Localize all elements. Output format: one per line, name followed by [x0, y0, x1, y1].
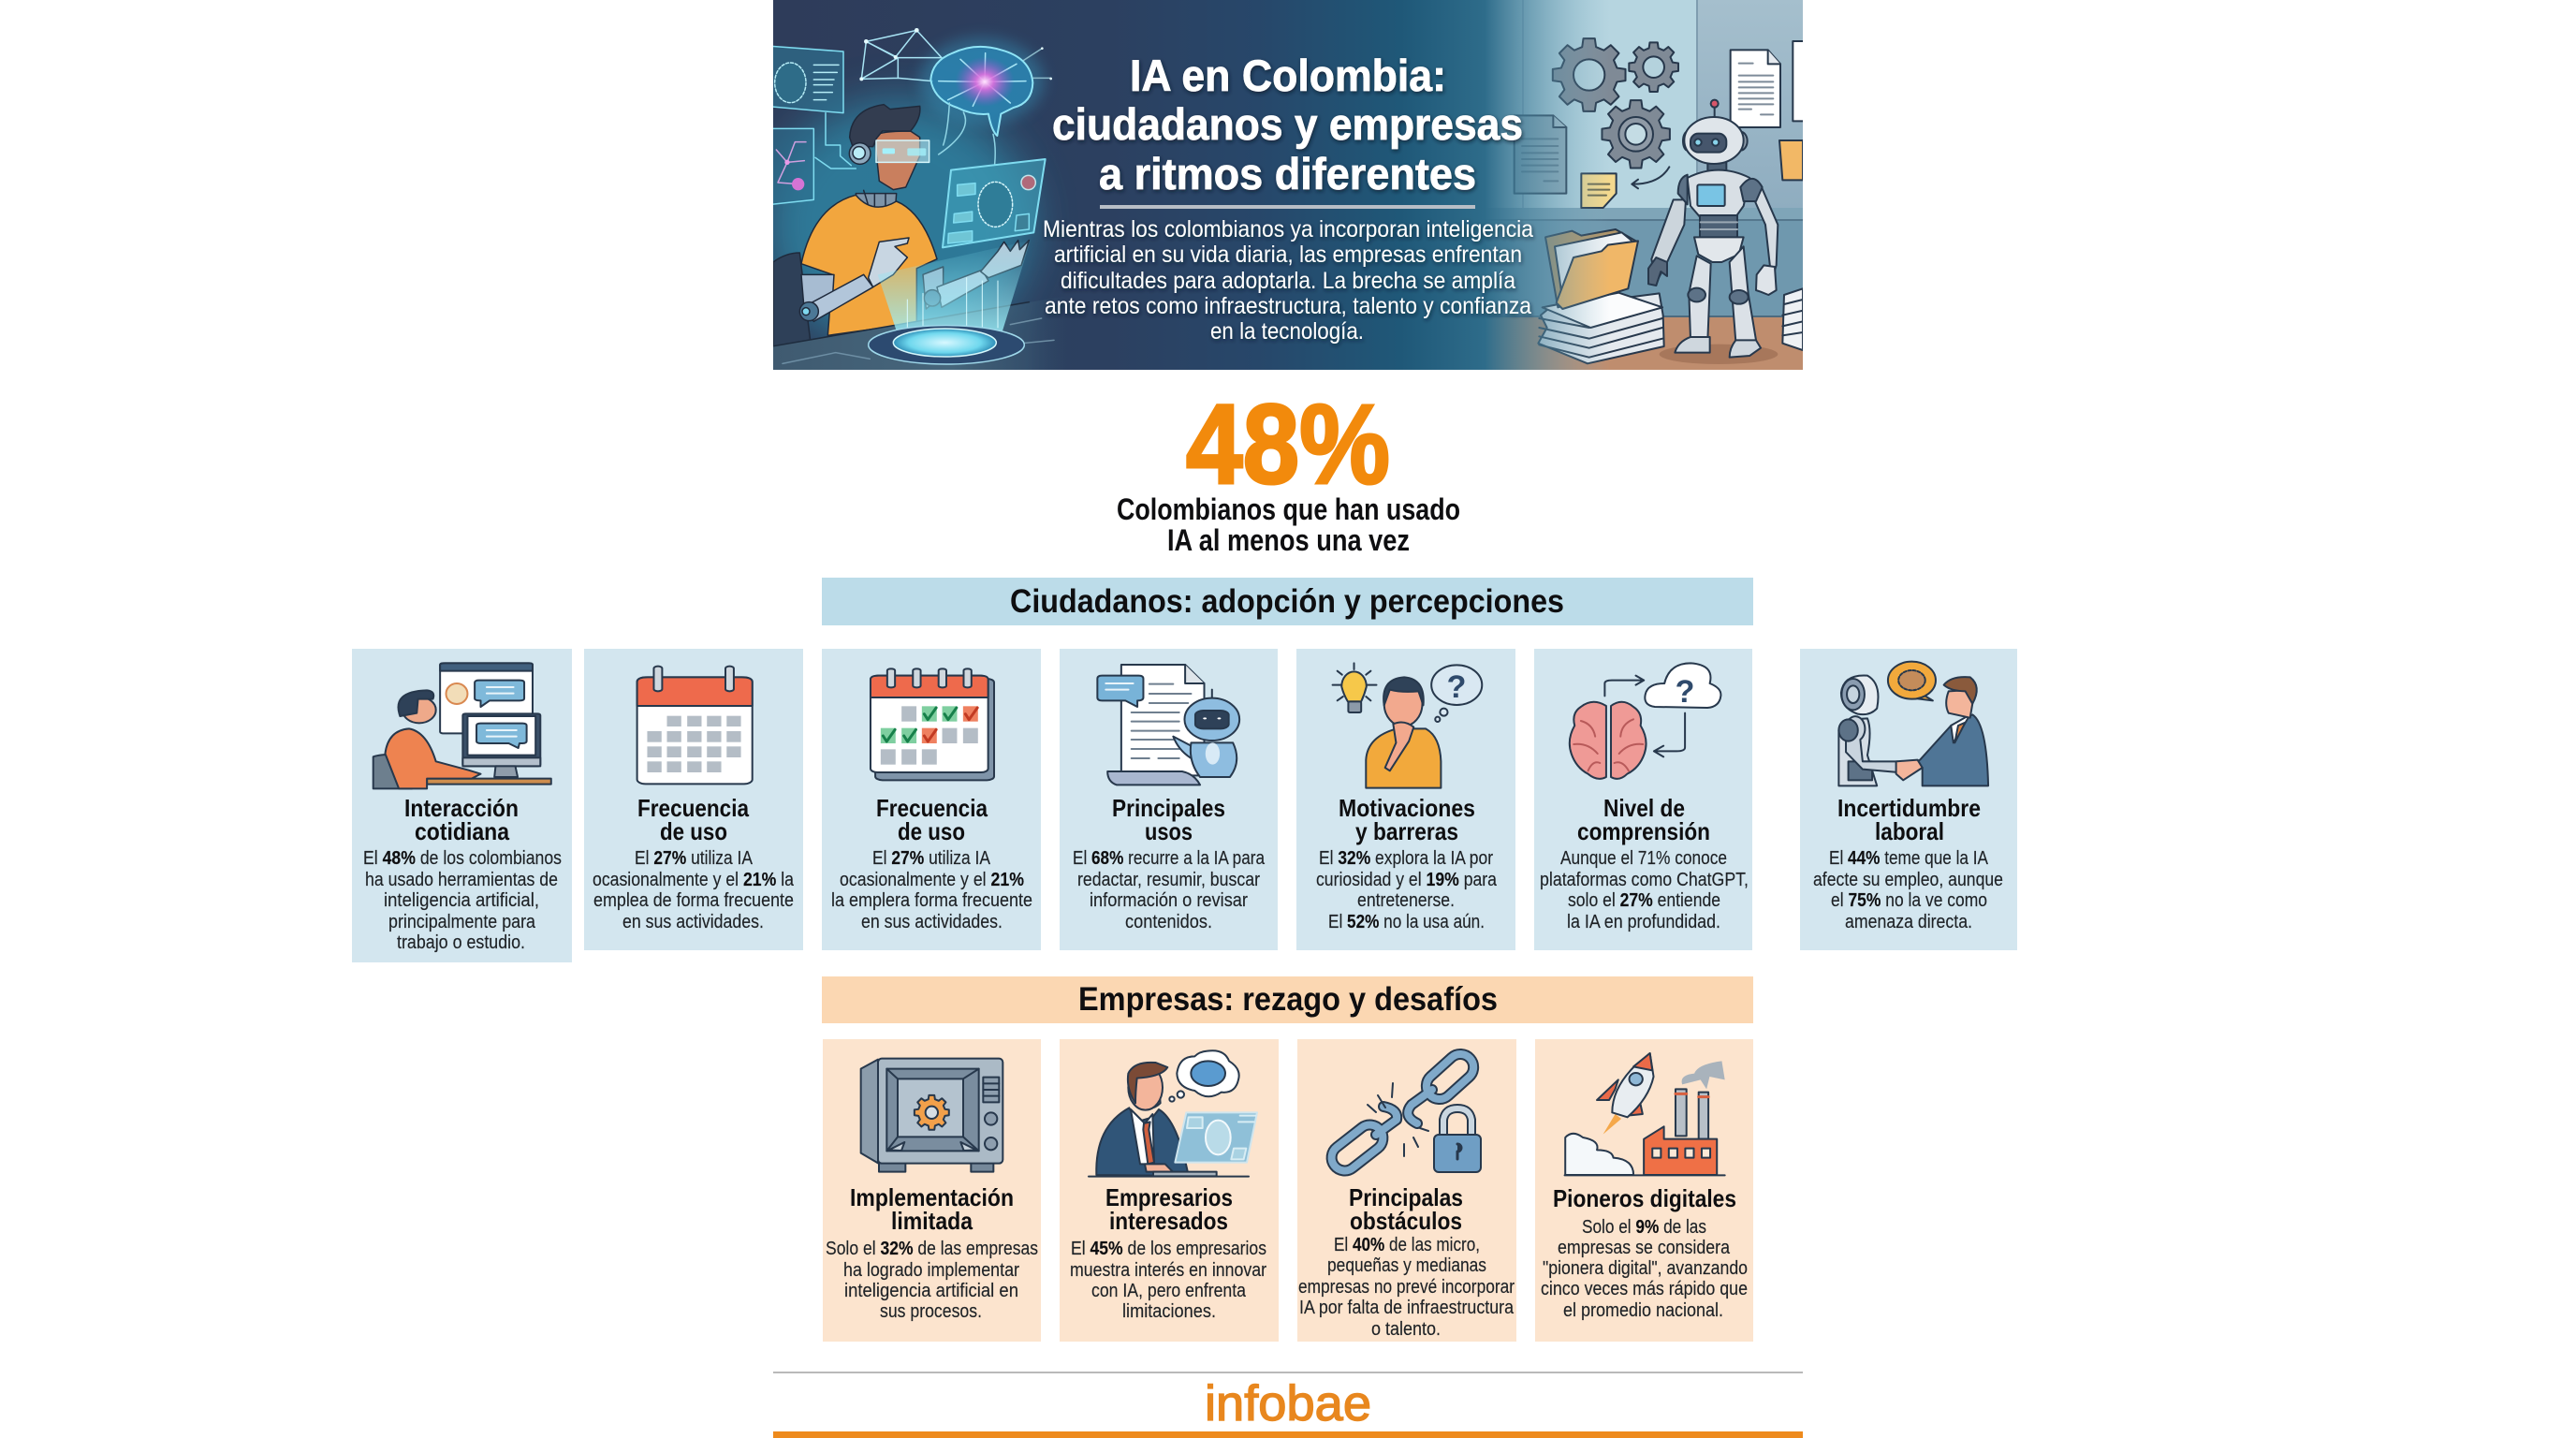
card title: comprensión — [1577, 817, 1710, 845]
card title: Interacción — [404, 794, 519, 822]
card text: El 48% de los colombianos — [363, 848, 562, 869]
card text: Solo el 32% de las empresas — [826, 1239, 1038, 1259]
card title — [850, 1183, 1014, 1235]
card text: IA por falta de infraestructura — [1299, 1298, 1515, 1318]
card: incertidumbre laboral — [1800, 649, 2017, 950]
card text: afecte su empleo, aunque — [1813, 870, 2003, 890]
card text: sus procesos. — [880, 1301, 982, 1322]
stat caption — [1117, 492, 1460, 557]
card text: "pionera digital", avanzando — [1543, 1258, 1748, 1279]
title divider — [1100, 205, 1475, 209]
big stat 48%: 48% — [1186, 380, 1390, 507]
icon: man — [773, 105, 1029, 349]
card text — [826, 1239, 1038, 1322]
card text — [1540, 848, 1749, 932]
card text: con IA, pero enfrenta — [1091, 1281, 1247, 1301]
footer bar — [773, 1431, 1803, 1438]
card text — [593, 848, 795, 932]
card text: inteligencia artificial en — [844, 1281, 1018, 1301]
card: principales usos — [1060, 649, 1278, 950]
card text — [363, 848, 562, 953]
card title: Frecuencia — [637, 794, 749, 822]
card title: de uso — [898, 817, 965, 845]
card title: Nivel de — [1603, 794, 1685, 822]
card: principales obstáculos — [1297, 1039, 1516, 1342]
icon: broken chain and padlock — [1326, 1049, 1481, 1176]
card text: El 45% de los empresarios — [1071, 1239, 1266, 1259]
card text: emplea de forma frecuente — [593, 890, 794, 911]
card text: en sus actividades. — [861, 912, 1003, 932]
card text: inteligencia artificial, — [384, 890, 539, 911]
card title: de uso — [660, 817, 727, 845]
card text: Aunque el 71% conoce — [1560, 848, 1727, 869]
icon: person at computer — [373, 663, 551, 788]
card text: en sus actividades. — [622, 912, 764, 932]
footer divider — [773, 1372, 1803, 1373]
section header: ciudadanos — [822, 578, 1753, 625]
icon: businessman with tablet — [1089, 1050, 1257, 1177]
card title: Motivaciones — [1339, 794, 1475, 822]
icon: rocket and factory — [1565, 1053, 1725, 1175]
card text: redactar, resumir, buscar — [1077, 870, 1260, 890]
card text — [1813, 848, 2003, 932]
card text: curiosidad y el 19% para — [1316, 870, 1498, 890]
card title: Implementación — [850, 1183, 1014, 1211]
icon: documents on wall — [1515, 41, 1806, 208]
icon: safe with gear — [861, 1059, 1003, 1172]
card title — [1837, 794, 1981, 845]
infobae logo: infobae — [1205, 1376, 1371, 1431]
card title: y barreras — [1355, 817, 1458, 845]
title: ciudadanos y empresas — [1052, 99, 1523, 149]
card text — [1316, 848, 1498, 932]
title: IA en Colombia: — [1130, 51, 1446, 100]
card title: Pioneros digitales — [1553, 1184, 1736, 1212]
card title: Empresarios — [1105, 1183, 1233, 1211]
big stat 48% — [1117, 380, 1460, 557]
card text: Solo el 9% de las — [1582, 1217, 1706, 1238]
section header: ciudadanos: Ciudadanos: adopción y percepciones — [1010, 583, 1564, 620]
card title: Frecuencia — [876, 794, 988, 822]
icon: folder and paper stack — [1538, 229, 1803, 363]
subtitle paragraph: ante retos como infraestructura, talento y confianza — [1045, 293, 1531, 319]
card: empresarios interesados — [1060, 1039, 1279, 1342]
card text: ha usado herramientas de — [365, 870, 558, 890]
card text: el promedio nacional. — [1563, 1300, 1723, 1321]
card text: El 32% explora la IA por — [1319, 848, 1493, 869]
card text: cinco veces más rápido que — [1541, 1279, 1748, 1299]
card: frecuencia de uso 1 — [584, 649, 803, 950]
subtitle paragraph: en la tecnología. — [1210, 318, 1364, 345]
card: motivaciones y barreras — [1296, 649, 1515, 950]
card text — [1073, 848, 1266, 932]
card title — [1349, 1183, 1463, 1235]
card text: solo el 27% entiende — [1568, 890, 1720, 911]
card text: empresas se considera — [1558, 1238, 1731, 1258]
card text: muestra interés en innovar — [1070, 1260, 1266, 1281]
illustration: man with holographic screens — [764, 28, 1073, 372]
icon: table with holographic projector — [771, 241, 1073, 372]
subtitle paragraph: dificultades para adoptarla. La brecha se amplía — [1061, 268, 1515, 294]
icon: calendar — [637, 667, 753, 784]
card text: ocasionalmente y el 21% la — [593, 870, 795, 890]
card title: obstáculos — [1350, 1207, 1462, 1235]
card title: Principales — [1112, 794, 1225, 822]
section header: empresas: Empresas: rezago y desafíos — [1078, 981, 1498, 1018]
card text: plataformas como ChatGPT, — [1540, 870, 1749, 890]
subtitle paragraph: artificial en su vida diaria, las empresas enfrentan — [1054, 242, 1522, 268]
icon: brain and cloud — [1570, 663, 1720, 779]
card text: El 52% no la usa aún. — [1328, 912, 1485, 932]
icon: screen with brain — [771, 46, 856, 204]
card text — [831, 848, 1032, 932]
card text: la IA en profundidad. — [1567, 912, 1720, 932]
stat caption: IA al menos una vez — [1167, 523, 1410, 557]
card text: la emplera forma frecuente — [831, 890, 1032, 911]
banner background: office room and gradient — [1490, 0, 1803, 370]
icon: calendar with checks — [871, 668, 994, 780]
card text: ha logrado implementar — [843, 1260, 1019, 1281]
section header: empresas — [822, 976, 1753, 1023]
icon: document and robot — [1097, 665, 1239, 785]
icon: office wall items and robot — [1515, 38, 1806, 364]
card text: información o revisar — [1090, 890, 1248, 911]
card text: principalmente para — [388, 912, 536, 932]
icon: glowing brain — [930, 47, 1032, 164]
card title — [637, 794, 749, 845]
card text — [1070, 1239, 1266, 1322]
card title: Principalas — [1349, 1183, 1463, 1211]
banner header — [764, 0, 1806, 372]
card text: El 27% utiliza IA — [872, 848, 991, 869]
banner left-to-right dark gradient — [773, 0, 1610, 370]
title: a ritmos diferentes — [1099, 149, 1476, 198]
card title: laboral — [1875, 817, 1944, 845]
card title — [1577, 794, 1710, 845]
icon: thinking person — [1333, 663, 1482, 788]
card text: El 44% teme que la IA — [1829, 848, 1989, 869]
card text: el 75% no la ve como — [1831, 890, 1987, 911]
title — [1052, 51, 1523, 198]
card: pioneros digitales — [1535, 1039, 1753, 1342]
card text: contenidos. — [1125, 912, 1212, 932]
subtitle paragraph — [1043, 216, 1533, 345]
icon: network — [859, 28, 1052, 81]
card title — [876, 794, 988, 845]
card text: entretenerse. — [1357, 890, 1455, 911]
icon: question mark: ? — [1447, 669, 1466, 705]
card text: ocasionalmente y el 21% — [840, 870, 1024, 890]
icon: question mark: ? — [1676, 674, 1694, 710]
card title: Incertidumbre — [1837, 794, 1981, 822]
card text: empresas no prevé incorporar — [1298, 1277, 1515, 1298]
card text: limitaciones. — [1122, 1301, 1216, 1322]
card title: cotidiana — [415, 817, 509, 845]
card: frecuencia de uso 2 — [822, 649, 1041, 950]
card: interacción cotidiana — [352, 649, 572, 962]
card text: El 40% de las micro, — [1334, 1235, 1480, 1255]
card text: trabajo o estudio. — [397, 932, 525, 953]
icon: robot — [1648, 100, 1778, 364]
icon: gears — [1553, 38, 1678, 169]
card text: El 68% recurre a la IA para — [1073, 848, 1266, 869]
icon: robot and businessman handshake — [1838, 662, 1988, 785]
card title: limitada — [891, 1207, 973, 1235]
card text: o talento. — [1371, 1319, 1441, 1340]
card text: pequeñas y medianas — [1327, 1255, 1486, 1276]
subtitle paragraph: Mientras los colombianos ya incorporan inteligencia — [1043, 216, 1533, 242]
card title — [1339, 794, 1475, 845]
card title — [1112, 794, 1225, 845]
icon: tablet hologram — [943, 159, 1046, 247]
card: implementación limitada — [823, 1039, 1041, 1342]
card: nivel de comprensión — [1534, 649, 1752, 950]
card title: usos — [1145, 817, 1193, 845]
card title: interesados — [1109, 1207, 1228, 1235]
card text: amenaza directa. — [1845, 912, 1972, 932]
card text: El 27% utiliza IA — [635, 848, 754, 869]
stat caption: Colombianos que han usado — [1117, 492, 1460, 526]
card title — [404, 794, 519, 845]
card text — [1541, 1217, 1748, 1321]
card title — [1105, 1183, 1233, 1235]
card text — [1298, 1235, 1515, 1340]
